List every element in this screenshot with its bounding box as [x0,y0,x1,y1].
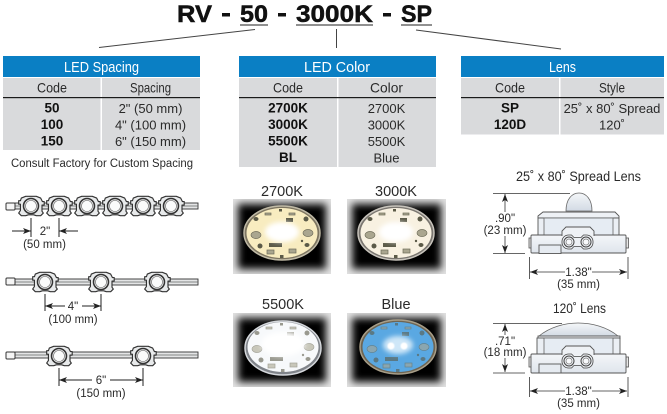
panel: Lens table: Style [599,80,625,96]
panel: LED Color table: LED Color [304,60,370,76]
panel: LED Spacing table: 6" (150 mm) [115,134,186,149]
diagram: 120 degree lens side view [484,323,628,410]
diagram: spread lens side view: (23 mm) [484,225,527,237]
panel: Lens table: 120˚ [599,118,625,132]
diagram: 4 inch spacing strip: 4" [68,301,78,313]
photo: 5500K LED: 5500K [262,297,304,313]
diagram: 4 inch spacing strip: (100 mm) [48,314,98,326]
diagram: 4 inch spacing strip [6,272,198,326]
photo: 3000K LED: 3000K [375,184,417,200]
title: part number: 3000K [296,1,374,28]
diagram: 6 inch spacing strip [6,346,198,400]
panel: LED Color table: Code [273,80,303,96]
title: part number: SP [401,1,432,28]
panel: LED Color table: 5500K [368,134,406,149]
diagram: 6 inch spacing strip: 6" [96,375,106,387]
panel: Lens table: Code [495,80,525,96]
panel: LED Spacing table: Spacing [130,80,171,96]
diagram: 2 inch spacing strip: (50 mm) [23,239,66,251]
heading: 120 degree lens: 120˚ Lens [553,301,606,316]
diagram: spread lens side view: 1.38" [565,267,592,279]
panel: LED Color table: 2700K [268,100,308,116]
photo: 3000K LED [347,184,446,274]
photo: 2700K LED: 2700K [261,184,303,200]
diagram: spread lens side view: (35 mm) [557,279,600,291]
panel: LED Spacing table: 150 [41,134,63,148]
panel: LED Color table: BL [279,150,297,165]
title: part number: RV [177,1,212,28]
diagram: 2 inch spacing strip [6,196,198,251]
diagram: 120 degree lens side view: (18 mm) [484,347,527,359]
panel: LED Color table: Blue [373,150,400,166]
diagram: spread lens side view: .90" [495,213,515,225]
panel: LED Color table: 3000K [268,117,308,132]
diagram: 120 degree lens side view: .71" [495,336,515,348]
panel: LED Spacing table: Code [37,80,67,96]
photo: Blue LED: Blue [381,297,411,313]
panel: LED Color table: 2700K [368,101,406,116]
panel: Lens table: 120D [494,117,526,132]
panel: Lens table [461,56,664,134]
diagram: 6 inch spacing strip: (150 mm) [76,388,126,400]
diagram: 2 inch spacing strip: 2" [40,226,50,238]
diagram: 120 degree lens side view: (35 mm) [557,398,600,410]
photo: Blue LED [347,297,446,387]
panel: LED Color table: 5500K [268,134,308,148]
diagram: spread lens side view [484,193,628,291]
panel: LED Spacing table: LED Spacing [64,60,139,76]
panel: LED Color table: Color [370,80,403,96]
title: part number [177,1,432,28]
panel: LED Color table [239,56,436,167]
panel: LED Spacing table: 100 [41,117,63,132]
diagram: 120 degree lens side view: 1.38" [565,386,592,398]
leader lines from part number to tables [99,29,561,49]
photo: 2700K LED [233,184,331,274]
panel: LED Spacing table: 2" (50 mm) [119,101,182,116]
heading: spread lens: 25˚ x 80˚ Spread Lens [516,169,641,184]
note: custom spacing: Consult Factory for Custom Spacing [11,158,193,170]
panel: LED Spacing table [3,56,200,150]
panel: Lens table: SP [501,100,519,116]
panel: LED Color table: 3000K [368,118,406,132]
panel: Lens table: 25˚ x 80˚ Spread [564,101,660,116]
title: part number: 50 [240,1,268,28]
panel: Lens table: Lens [549,60,576,76]
panel: LED Spacing table: 4" (100 mm) [115,118,186,132]
panel: LED Spacing table: 50 [44,100,60,116]
photo: 5500K LED [233,297,331,387]
